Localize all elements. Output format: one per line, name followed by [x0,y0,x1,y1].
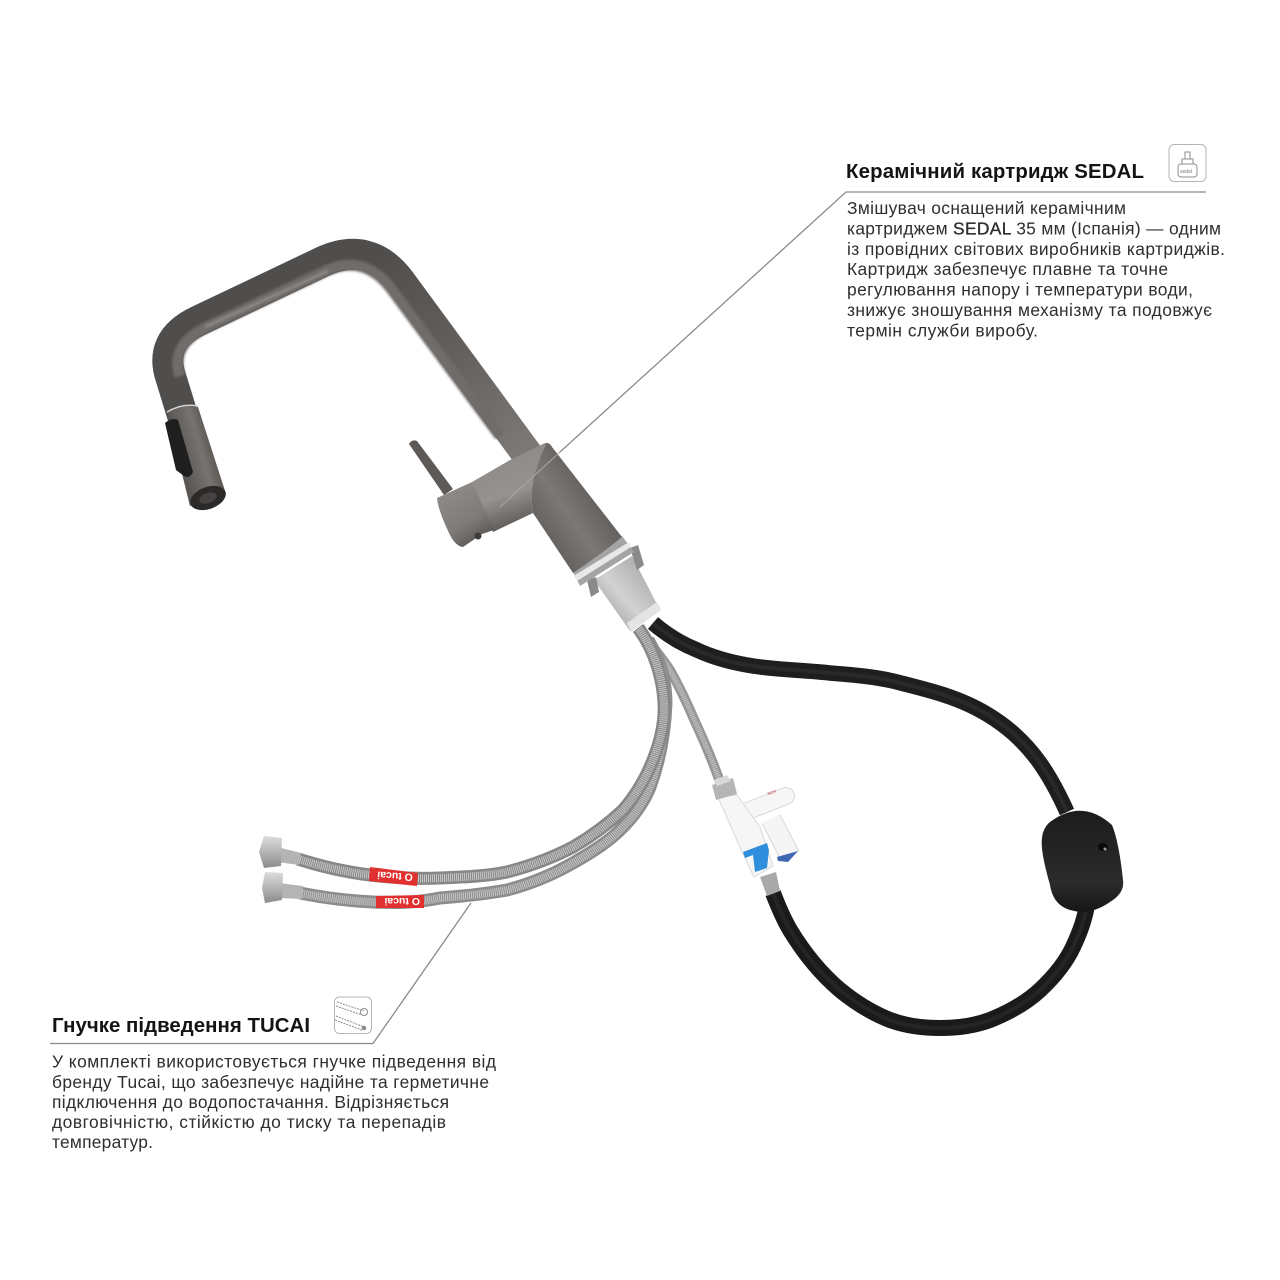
red Tucai label upper: O tucai [377,869,413,883]
braided water supply hose upper [298,628,664,878]
icon: cartridge [1169,144,1206,182]
black pull-out hose lower loop [773,893,1088,1028]
icon: cartridge: sedal [1180,169,1192,175]
black pull-out hose upper section [653,623,1067,812]
callout leader: cartridge [500,192,1206,507]
text block: hose description: температур. [52,1132,153,1152]
icon: flexible hoses [334,997,372,1034]
faucet body vertical part [532,443,622,573]
text block: hose description: довговічністю, стійкістю до тиску та перепадів [52,1112,446,1132]
text block: cartridge description: Змішувач оснащений керамічним [847,198,1126,218]
hose nut lower [262,872,303,903]
text block: cartridge description [847,198,1225,340]
text block: hose description: У комплекті використовується гнучке підведення від [52,1052,496,1072]
white T-fitting [712,775,798,896]
text block: hose description: підключення до водопостачання. Відрізняється [52,1092,449,1112]
text block: cartridge description: регулювання напору і температури води, [847,280,1193,300]
text block: cartridge description: знижує зношування механізму та подовжує [847,300,1212,320]
heading: flexible hose: Гнучке підведення TUCAI [52,1015,310,1037]
heading: ceramic cartridge: Керамічний картридж SEDAL [846,161,1144,183]
text block: hose description: бренду Tucai, що забезпечує надійне та герметичне [52,1072,489,1092]
black hose weight [1042,811,1123,912]
red Tucai label lower: O tucai [384,895,420,907]
text block: cartridge description: Картридж забезпечує плавне та точне [847,259,1168,279]
spout tube [168,254,530,498]
text block: cartridge description: картриджем SEDAL 35 мм (Іспанія) — одним [847,218,1221,238]
braided water supply hose lower [300,640,666,903]
text block: cartridge description: термін служби виробу. [847,320,1038,340]
hose nut upper [259,836,301,868]
callout leader: flexible hose [50,903,471,1044]
text block: hose description [52,1052,496,1152]
lever handle [409,440,453,495]
text block: cartridge description: із провідних світових виробників картриджів. [847,239,1225,259]
white T-fitting: MCP [767,789,777,796]
illustration: pull-down kitchen faucet with hoses [165,254,1123,1028]
threaded shank [594,556,661,632]
braided hose to T-fitting [640,627,720,782]
spray head [165,405,229,515]
red Tucai label lower [376,895,424,908]
lever cap [437,482,494,547]
red Tucai label upper [369,867,418,886]
faucet body horizontal arm [472,444,546,532]
mounting ring and bolts [572,536,644,597]
